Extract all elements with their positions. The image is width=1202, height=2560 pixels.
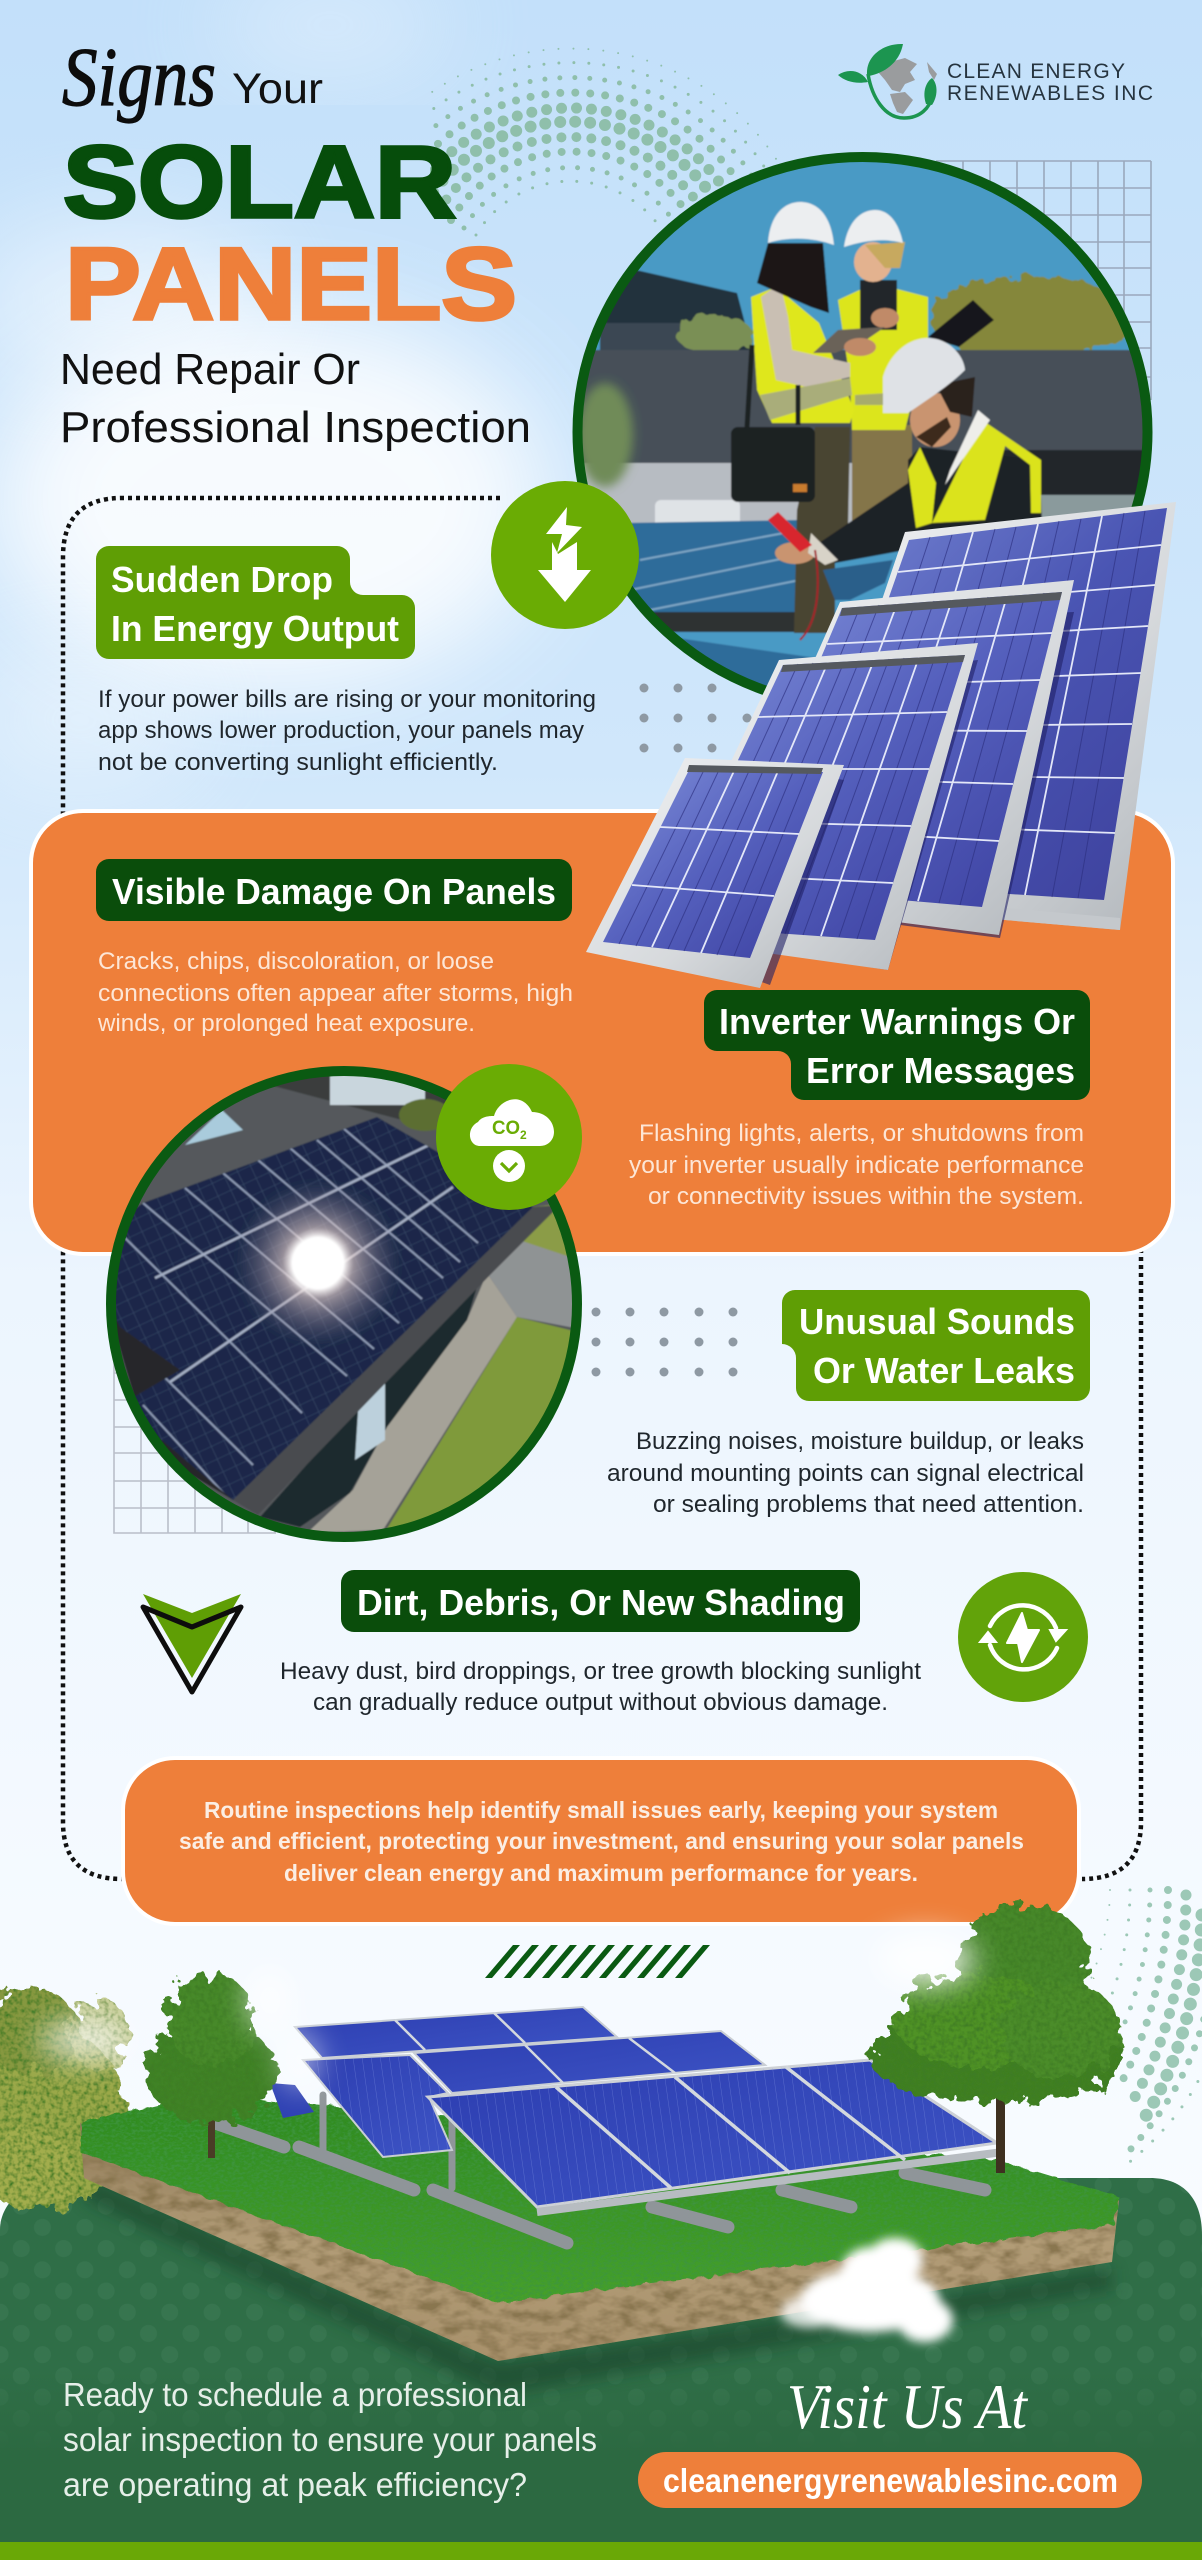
halftone dots top [430,48,777,236]
tag: sudden drop [96,546,415,659]
button: website url [638,2452,1142,2508]
section: inverter warnings [629,990,1090,1210]
van [654,499,740,524]
solar panel large back [778,502,1176,930]
section: sudden drop [96,546,596,776]
title solar: SOLAR [63,125,456,239]
jeans [823,560,893,600]
gutter [233,1205,560,1515]
hand and meter [775,542,815,564]
solar panel second [648,643,978,970]
clipboard [928,300,994,347]
text: inverter body: or connectivity issues within the system. [648,1183,1084,1210]
section: visible damage [96,859,573,1037]
halftone dots lower right [1075,1890,1202,2170]
text: visible damage body [97,948,573,1037]
logo globe [838,44,937,118]
woman legs [794,427,850,633]
windows [260,1267,483,1527]
tag: unusual sounds: Unusual Sounds [799,1301,1075,1342]
solar panel third [709,580,1074,938]
dark under array left [100,1203,233,1500]
bag [731,427,815,502]
tag: sudden drop: In Energy Output [111,608,399,649]
icon: energy drop badge [491,481,639,629]
grass top [80,2095,1119,2303]
tag: visible damage: Visible Damage On Panels [112,871,556,912]
heading: visit us at: Visit Us At [787,2371,1029,2442]
text: call to action: Ready to schedule a professional [63,2376,527,2413]
tablet [813,327,885,353]
callout: routine inspections [123,1758,1079,1924]
button: website url: cleanenergyrenewablesinc.com [663,2462,1118,2499]
mid row [414,2031,765,2093]
section: dirt debris [280,1570,921,1716]
man behind head [854,242,892,282]
title script word: Signs [62,31,216,124]
woman hair [757,243,829,313]
text: inverter body [629,1120,1084,1210]
dots near photo [640,684,752,752]
icon: down chevron arrow [143,1594,241,1692]
footer bar [0,2542,1202,2560]
mounting rails [215,2095,985,2243]
landscape: bottom section [0,1903,1202,2560]
title line need repair: Need Repair Or [60,345,360,394]
woman torso [751,287,854,423]
logo text line two: RENEWABLES INC [947,82,1153,105]
front row [428,2060,997,2207]
icon: CO2 badge: 2 [520,1128,527,1142]
logo text: CLEAN ENERGY [947,60,1125,83]
trees behind [930,276,1130,360]
man behind torso [838,287,928,430]
left block [303,2055,452,2157]
panel: orange visible damage and inverter band [31,811,1173,1254]
logo [838,44,1153,118]
sun glare [233,1178,403,1348]
text: unusual sounds body: or sealing problems that need attention. [653,1491,1084,1518]
diagonal stripes [485,1945,710,1978]
text: inverter body: your inverter usually indicate performance [629,1152,1084,1179]
text: sudden drop body: not be converting sunlight efficiently. [98,749,498,776]
text: unusual sounds body: Buzzing noises, moisture buildup, or leaks [636,1428,1084,1455]
clouds [40,1934,975,2342]
illustration: four solar panels [586,502,1176,988]
grid top right [936,161,1151,400]
text: call to action: solar inspection to ensure your panels [63,2421,597,2458]
solar panel small front [586,758,844,988]
tag: unusual sounds [782,1290,1090,1401]
photo: workers inspecting solar [570,150,1160,720]
photo: rooftop solar with sun glare [100,1060,590,1550]
icon: CO2 badge [436,1064,582,1210]
kneeling man jacket [819,447,1042,563]
text: visible damage body: winds, or prolonged heat exposure. [97,1010,475,1037]
title line professional inspection: Professional Inspection [60,403,531,452]
dots beside rooftop photo [592,1308,738,1376]
text: call to action: are operating at peak efficiency? [63,2466,527,2503]
icon: renewable energy cycle [958,1572,1088,1702]
solar array [100,1117,533,1500]
text: call to action [63,2376,597,2503]
text: visible damage body: Cracks, chips, discoloration, or loose [98,948,494,975]
grass top right [523,1204,567,1256]
tag: inverter warnings: Inverter Warnings Or [719,1001,1075,1042]
green footer band [0,2175,1202,2560]
lawn [386,1316,570,1528]
tag: sudden drop: Sudden Drop [111,559,333,600]
text: sudden drop body: If your power bills are rising or your monitoring [98,686,596,713]
text: dirt body: can gradually reduce output without obvious damage. [313,1689,888,1716]
kneeling man vest [908,447,936,528]
section: unusual sounds [607,1290,1090,1518]
text: unusual sounds body: around mounting points can signal electrical [607,1460,1084,1487]
woman helmet [768,202,834,245]
text: dirt body: Heavy dust, bird droppings, or tree growth blocking sunlight [280,1658,921,1685]
wall [570,350,1160,463]
patio [488,1240,572,1328]
callout: routine inspections: Routine inspections help identify small issues early, keeping your system [204,1797,998,1823]
title [60,31,531,452]
man behind legs [852,425,912,525]
tag: dirt debris: Dirt, Debris, Or New Shading [357,1582,845,1623]
text: unusual sounds body [607,1428,1084,1518]
tag: dirt debris [341,1570,860,1632]
tag: inverter warnings: Error Messages [806,1050,1075,1091]
kneeling man helmet [883,338,965,413]
bush [577,383,633,487]
icon: CO2 badge: CO [492,1118,520,1139]
text: sudden drop body [98,686,596,776]
small far left [270,2083,314,2118]
tile roof base [119,1086,571,1532]
text: visible damage body: connections often appear after storms, high [98,980,573,1007]
text: inverter body: Flashing lights, alerts, or shutdowns from [639,1120,1084,1147]
rooftop panels [631,519,798,613]
concrete path [307,1273,517,1533]
kneeling man face [910,393,960,447]
dotted outline frame [63,498,1141,1879]
title word your: Your [232,65,323,113]
left bushes [0,1988,130,2210]
building left [600,270,752,350]
back row [295,2007,617,2058]
tag: unusual sounds: Or Water Leaks [813,1350,1075,1391]
soil block [80,2123,1119,2361]
title panels: PANELS [65,227,517,341]
tag: visible damage [96,859,572,921]
house behind [276,1076,446,1120]
tag: inverter warnings [704,990,1090,1100]
solar array on grass [215,2007,1003,2243]
grid lower left [114,1347,276,1533]
callout: routine inspections: safe and efficient, protecting your investment, and ensuring your solar panels [179,1828,1024,1854]
tree right [869,1903,1125,2173]
callout: routine inspections: deliver clean energy and maximum performance for years. [284,1860,918,1886]
tree left [145,1974,277,2158]
text: dirt body [280,1658,921,1716]
text: sudden drop body: app shows lower production, your panels may [98,717,584,744]
